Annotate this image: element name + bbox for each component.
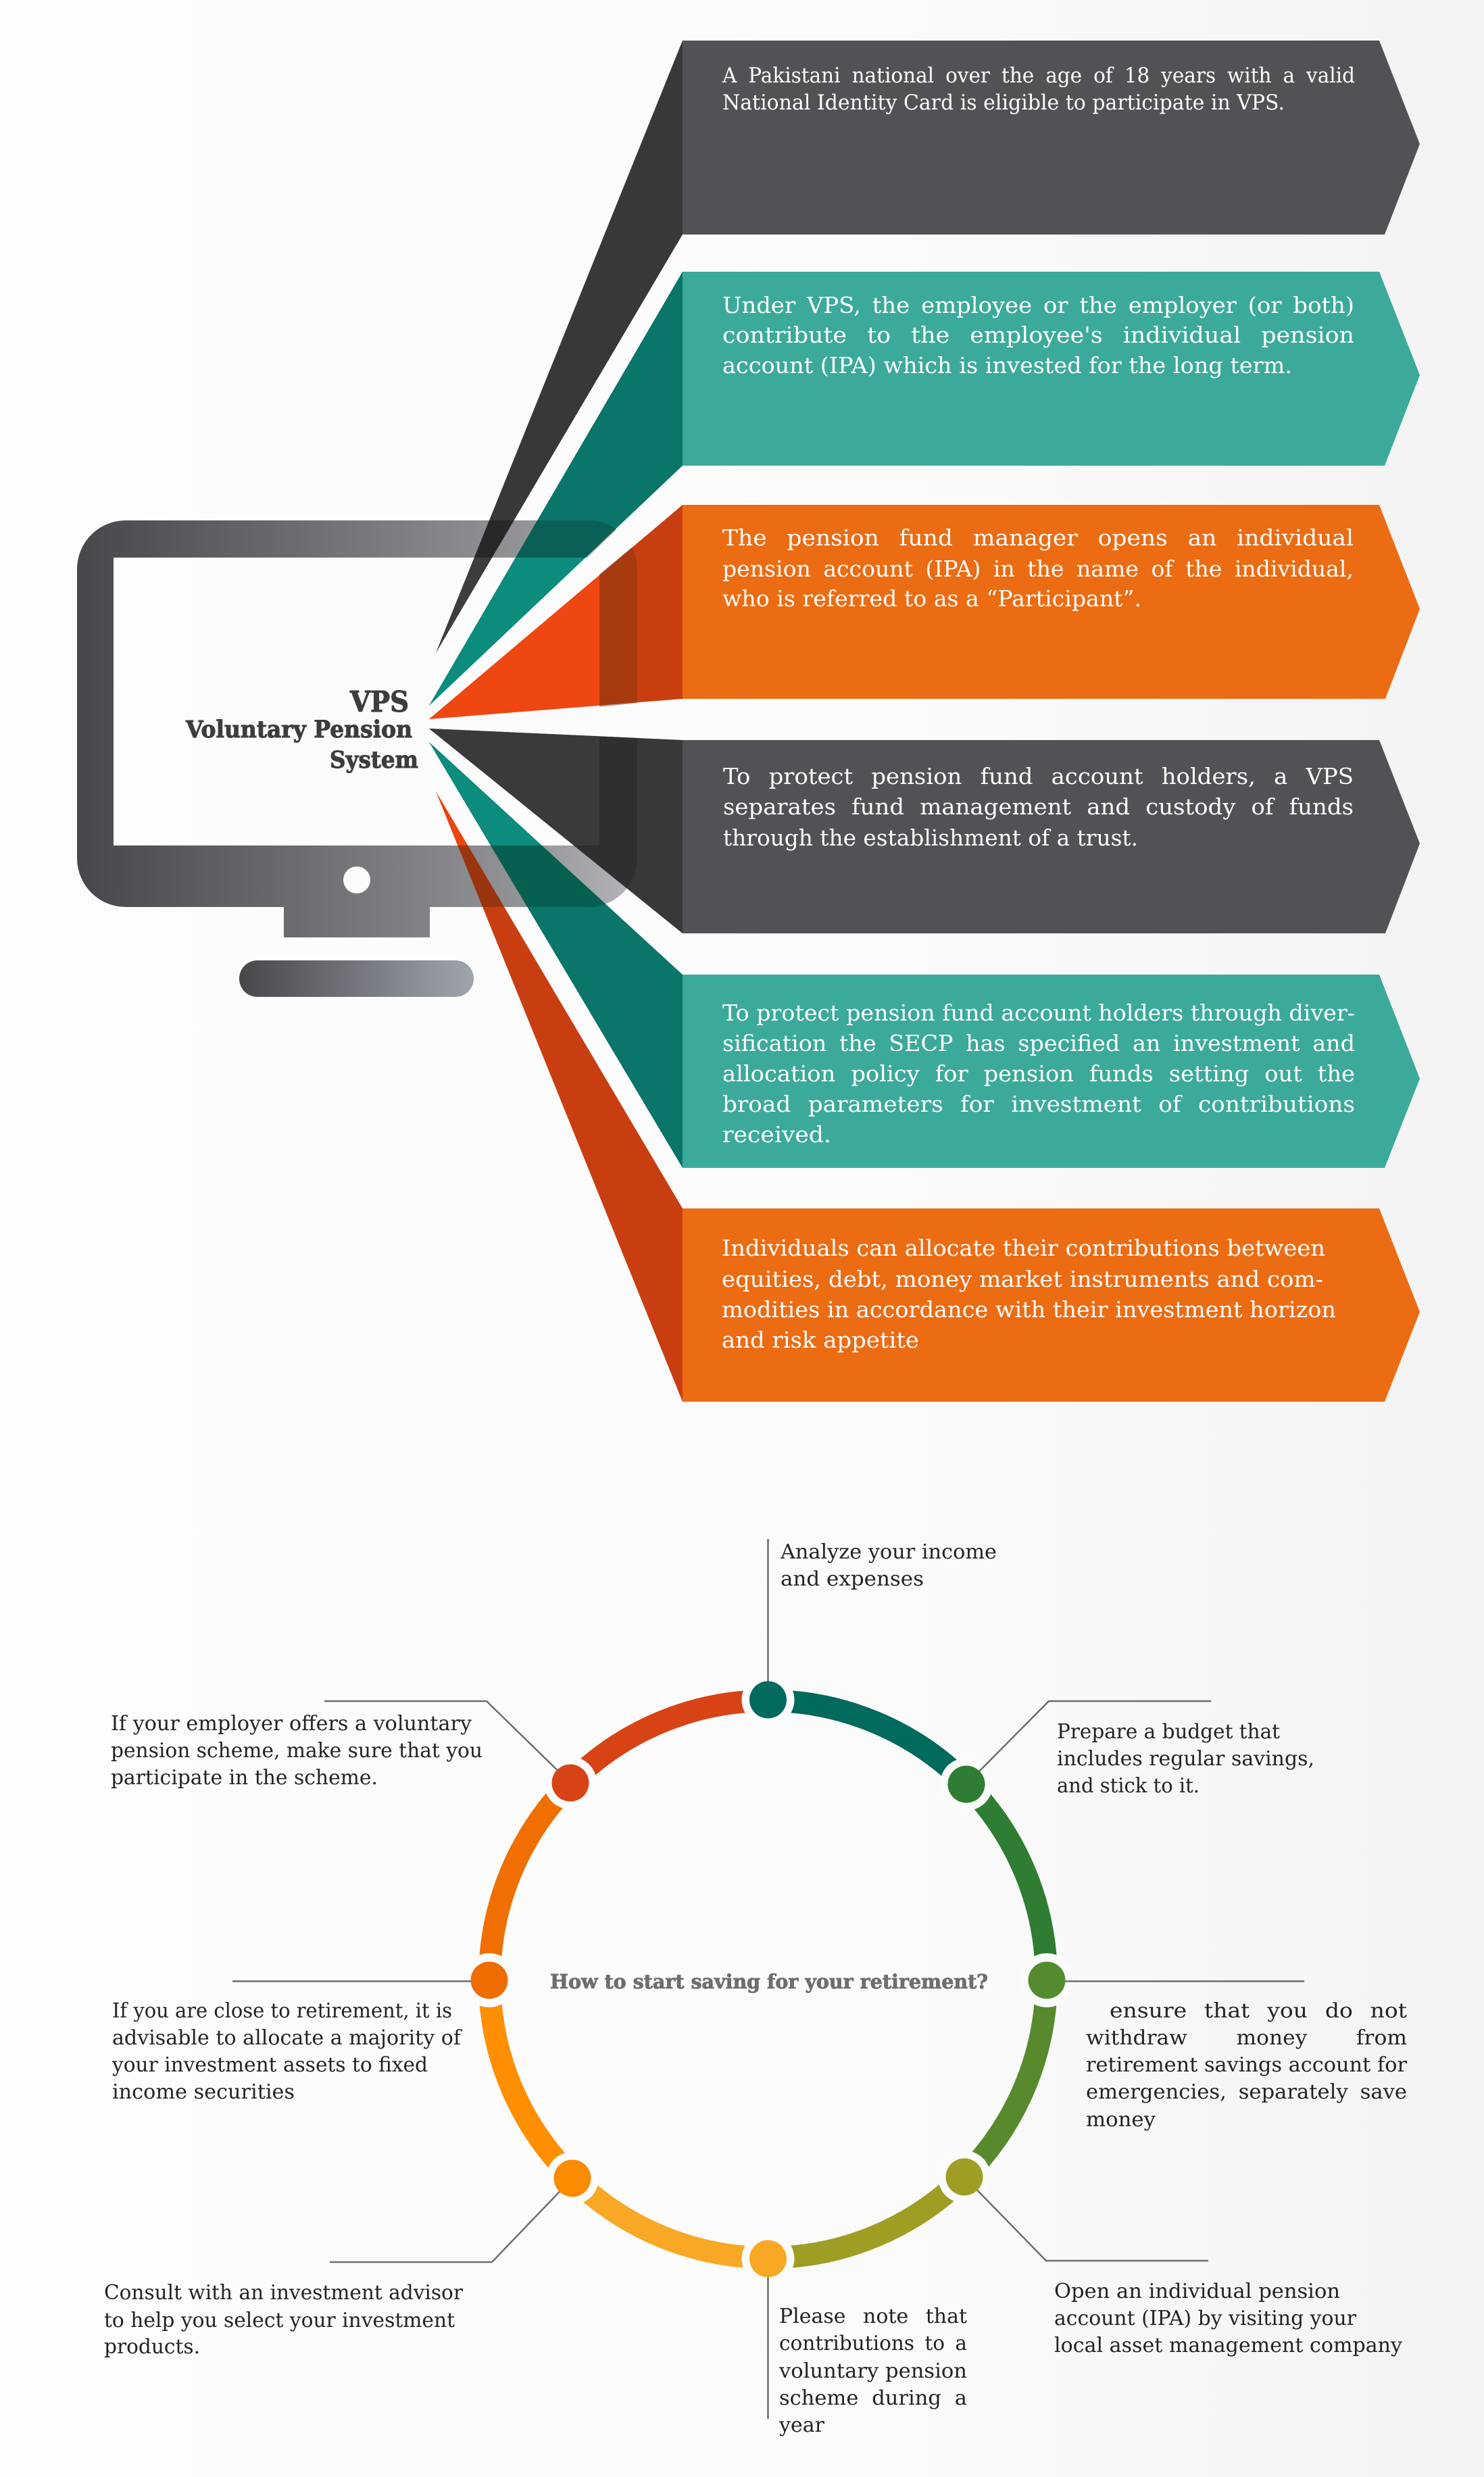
panel: eligibility: A Pakistani national over the age of 18 years with a valid — [722, 64, 1355, 88]
panel: contributions: Under VPS, the employee or the employer (or both) — [722, 292, 1354, 318]
panel: diversification: received. — [722, 1121, 831, 1148]
text: do not withdraw: ensure that you do not — [1110, 1999, 1407, 2023]
panel: diversification — [683, 975, 1420, 1168]
text: consult advisor: Consult with an investment advisor — [104, 2281, 464, 2305]
panel: diversification: To protect pension fund account holders through diver- — [722, 1000, 1355, 1026]
panel: diversification: sification the SECP has specified an investment and — [722, 1030, 1355, 1056]
heading: how to start saving: How to start saving for your retirement? — [550, 1970, 988, 1993]
text: prepare budget — [1057, 1720, 1314, 1798]
panel: trust protection: separates fund management and custody of funds — [723, 793, 1354, 820]
wedge 3: orange — [429, 505, 683, 719]
wedge 2: teal — [429, 272, 683, 706]
panel: eligibility: National Identity Card is eligible to participate in VPS. — [722, 91, 1285, 115]
wedge 1: dark — [436, 41, 683, 653]
text: do not withdraw: money — [1086, 2108, 1156, 2132]
text: close to retirement: If you are close to retirement, it is — [112, 1999, 452, 2023]
panel: contributions: contribute to the employee's individual pension — [722, 322, 1354, 348]
text: analyze income: and expenses — [781, 1567, 924, 1591]
node halos — [462, 1673, 1074, 2285]
text: open account: local asset management company — [1054, 2334, 1402, 2357]
chart: segmented ring — [489, 1700, 1046, 2257]
text: consult advisor: products. — [104, 2335, 200, 2359]
text: open account: account (IPA) by visiting your — [1054, 2307, 1357, 2330]
text: open account — [1054, 2280, 1402, 2357]
ring nodes — [470, 1682, 1065, 2278]
text: do not withdraw: withdraw money from — [1086, 2026, 1407, 2050]
icon: computer monitor — [77, 466, 683, 997]
text: employer scheme: participate in the scheme. — [111, 1766, 378, 1790]
text: analyze income — [780, 1540, 997, 1591]
text: prepare budget: and stick to it. — [1057, 1774, 1199, 1798]
panel: trust protection: To protect pension fund account holders, a VPS — [723, 763, 1354, 789]
wedge 5: teal — [429, 742, 683, 1168]
panel: allocation: equities, debt, money market instruments and com- — [722, 1266, 1323, 1292]
panel: allocation: and risk appetite — [722, 1327, 919, 1353]
text: do not withdraw: emergencies, separately save — [1086, 2080, 1407, 2104]
text: consult advisor — [104, 2281, 464, 2359]
panel: contributions: account (IPA) which is invested for the long term. — [722, 352, 1292, 378]
text: close to retirement: income securities — [112, 2080, 295, 2104]
title: VPS Voluntary Pension System: VPS — [349, 685, 409, 718]
panel: trust protection: through the establishment of a trust. — [723, 825, 1138, 851]
panel: eligibility — [683, 41, 1420, 235]
text: close to retirement: advisable to allocate a majority of — [112, 2026, 462, 2050]
title: VPS Voluntary Pension System: System — [330, 746, 418, 774]
panel: diversification: broad parameters for investment of contributions — [722, 1091, 1355, 1117]
text: close to retirement — [112, 1999, 462, 2104]
wedge 6: orange — [436, 791, 683, 1402]
text: please note: voluntary pension — [778, 2359, 967, 2383]
text: please note: scheme during a — [779, 2386, 967, 2410]
panel: allocation: modities in accordance with their investment horizon — [722, 1296, 1336, 1323]
panel: fund manager: The pension fund manager opens an individual — [722, 524, 1354, 551]
text: do not withdraw — [1086, 1999, 1408, 2132]
text: employer scheme — [111, 1712, 483, 1790]
panel: fund manager: pension account (IPA) in the name of the individual, — [722, 556, 1354, 582]
text: prepare budget: Prepare a budget that — [1057, 1720, 1280, 1744]
panel: contributions — [683, 272, 1420, 466]
text: do not withdraw: retirement savings account for — [1086, 2053, 1408, 2077]
panel: trust protection — [683, 740, 1420, 933]
connector lines — [232, 1539, 1304, 2419]
text: employer scheme: pension scheme, make sure that you — [111, 1739, 483, 1763]
text: analyze income: Analyze your income — [780, 1540, 997, 1564]
panel: fund manager: who is referred to as a “Participant”. — [722, 585, 1141, 612]
text: please note: year — [778, 2413, 825, 2437]
text: close to retirement: your investment assets to fixed — [112, 2053, 428, 2077]
wedge 4: dark — [429, 729, 683, 933]
title: VPS Voluntary Pension System: Voluntary Pension — [185, 716, 412, 743]
title: VPS Voluntary Pension System — [185, 685, 418, 774]
panel: fund manager — [683, 505, 1420, 699]
panel: allocation: Individuals can allocate their contributions between — [722, 1235, 1325, 1261]
panel: diversification: allocation policy for pension funds setting out the — [722, 1060, 1355, 1087]
text: please note: contributions to a — [779, 2332, 967, 2355]
panel: allocation — [683, 1208, 1420, 1402]
text: employer scheme: If your employer offers a voluntary — [111, 1712, 472, 1736]
text: please note: Please note that — [779, 2305, 967, 2328]
text: consult advisor: to help you select your investment — [104, 2309, 455, 2332]
text: please note — [778, 2305, 967, 2437]
text: prepare budget: includes regular savings, — [1057, 1747, 1314, 1771]
text: open account: Open an individual pension — [1054, 2280, 1340, 2303]
